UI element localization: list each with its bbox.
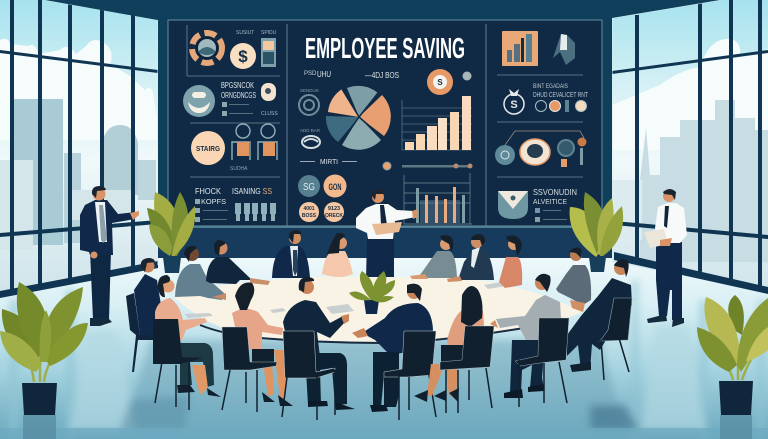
person: peach woman xyxy=(322,233,353,277)
text: section heading: BINT EGADAIS xyxy=(533,83,569,90)
icon: dollar coin xyxy=(427,69,453,95)
clouds and skyline xyxy=(612,39,768,262)
head xyxy=(92,188,106,200)
badge: GON xyxy=(324,174,346,198)
text: label: CLUSS xyxy=(261,111,278,117)
icon: money bag: S xyxy=(510,99,518,111)
badge: peach circle: STAIRG xyxy=(196,144,220,153)
badge: peach circle xyxy=(191,131,225,165)
title: EMPLOYEE SAVING xyxy=(305,33,465,65)
icon: dollar coin: S xyxy=(437,78,443,87)
text: pie label: UHU xyxy=(317,70,331,79)
badge: peach right: 9123 xyxy=(328,206,340,212)
progress strip xyxy=(402,164,472,168)
badge: peach left xyxy=(299,202,319,222)
wall behind board xyxy=(45,0,720,258)
text: section heading: ORNGDNCGS xyxy=(221,91,256,100)
icon: gear ring xyxy=(192,33,222,63)
icon: row of people xyxy=(235,203,276,221)
person: navy suit xyxy=(447,234,494,282)
person: grey-blue top xyxy=(175,246,226,300)
text: section heading: SSVONUDIN xyxy=(533,187,577,197)
shirt and tie xyxy=(95,202,107,242)
icon: face badge xyxy=(183,85,215,117)
person: standing man right xyxy=(644,189,687,327)
panel: left column infographics xyxy=(183,30,278,222)
text: caption: SENDUS xyxy=(300,88,319,93)
icon: megaphone xyxy=(553,34,575,65)
text: caption: ADD BAR xyxy=(300,128,321,133)
shoes xyxy=(90,318,112,326)
person: grey woman xyxy=(410,235,457,279)
panel: right column infographics xyxy=(495,31,589,222)
person: suit front left with chair xyxy=(282,277,355,420)
right window xyxy=(612,0,768,294)
badge: peach right: ORECK xyxy=(325,213,343,219)
plant: table centerpiece xyxy=(349,271,395,314)
caption label: SPIDU xyxy=(261,30,277,36)
person: standing man left xyxy=(80,186,139,326)
badge: GON: GON xyxy=(328,182,342,192)
icons: coin row xyxy=(536,100,586,112)
person: long hair woman with chair xyxy=(414,286,494,413)
icon: small grey coin xyxy=(462,72,472,80)
person: suit front center with chair xyxy=(352,284,436,420)
badge: peach left: BOSS xyxy=(302,213,317,219)
city buildings xyxy=(0,99,156,250)
text: section heading: DHUD CEVALICET RNT xyxy=(533,92,589,99)
text: section heading: BPGSNCOK xyxy=(221,81,254,90)
person: coral woman xyxy=(499,236,522,288)
text: pie label: PSD xyxy=(304,71,317,77)
legs xyxy=(90,250,111,320)
floor xyxy=(0,258,768,439)
person: black top xyxy=(206,240,270,285)
icon: figures xyxy=(232,124,277,160)
lower bar chart xyxy=(404,173,472,224)
text: section heading: FHOCK xyxy=(195,186,221,196)
person: suit far left xyxy=(126,258,161,372)
badge: SG xyxy=(298,175,320,197)
plant: front left xyxy=(0,282,88,439)
pot xyxy=(22,383,57,415)
person: suit reclining right xyxy=(567,259,632,380)
text: label: SUDHA xyxy=(230,166,248,172)
hand xyxy=(130,211,139,220)
icon: money bag xyxy=(504,89,524,114)
legend items xyxy=(195,199,228,222)
icon: small orange dot xyxy=(383,162,391,170)
person: peach top woman with chair xyxy=(222,283,293,412)
badge: peach left: 4001 xyxy=(303,206,315,212)
plant: back left xyxy=(147,192,195,273)
icon: squiggle xyxy=(302,136,320,148)
badge: SG: SG xyxy=(303,182,315,193)
conference table xyxy=(174,277,582,343)
text: label: KOPFS xyxy=(201,197,226,206)
seated people back row xyxy=(126,230,632,380)
plant: back right xyxy=(570,192,623,272)
left window xyxy=(0,0,158,298)
clouds xyxy=(0,39,157,140)
suit xyxy=(80,200,135,255)
icon: card xyxy=(261,38,276,67)
text: pie label: —4DJ BOS xyxy=(365,70,399,80)
seated people front row xyxy=(153,274,569,420)
person: bare-shoulder woman with chair xyxy=(153,275,221,410)
panel: center column charts xyxy=(298,69,472,224)
person: grey right xyxy=(556,248,591,305)
person: suit back xyxy=(272,230,310,278)
text: section heading: ALVEITICE xyxy=(533,199,567,206)
legend items xyxy=(535,208,567,222)
pot xyxy=(719,381,753,415)
pie chart xyxy=(326,86,391,150)
presentation board xyxy=(168,20,602,226)
person: presenter center xyxy=(356,189,418,280)
icon: shield banner xyxy=(498,191,528,219)
text: section heading: ISANING SS xyxy=(232,186,272,196)
icons: flow row xyxy=(495,131,586,167)
plant: front right xyxy=(697,295,768,439)
bar chart xyxy=(402,96,472,150)
icon: spiral xyxy=(299,95,319,115)
caption labels: SUSIUT xyxy=(236,30,254,36)
icon: tan chart card xyxy=(502,31,538,66)
person: grey shirt man with chair xyxy=(490,274,569,407)
icon: dollar coin xyxy=(230,43,256,69)
legend items xyxy=(222,102,253,116)
badge: peach right xyxy=(324,202,344,222)
icon: shield xyxy=(261,83,276,101)
text: divider label: MIRTI xyxy=(320,157,338,166)
icon: dollar coin: $ xyxy=(238,47,248,66)
floor reflections xyxy=(10,280,764,439)
